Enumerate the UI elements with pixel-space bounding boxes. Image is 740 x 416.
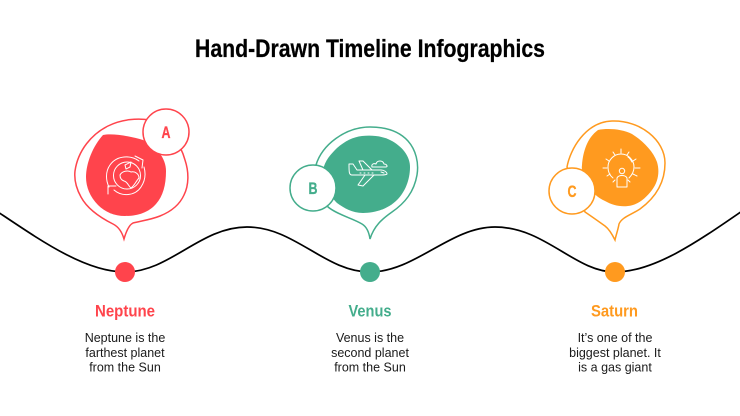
- blob: Neptune: [86, 134, 166, 216]
- description: Saturn: biggest planet. It: [569, 346, 661, 360]
- marker dot: Saturn: [605, 262, 625, 282]
- description: Venus: Venus is the: [336, 331, 404, 345]
- milestone: Venus: [290, 127, 418, 374]
- milestone: Saturn: [549, 121, 665, 374]
- description: Neptune: farthest planet: [85, 346, 165, 360]
- pin outline: Venus: [316, 127, 418, 239]
- icon: light bulb with person: [603, 149, 640, 187]
- blob: Venus: [323, 136, 410, 213]
- marker dot: Neptune: [115, 262, 135, 282]
- blob: Saturn: [582, 129, 658, 206]
- description: Venus: from the Sun: [334, 360, 406, 374]
- description: Saturn: is a gas giant: [578, 360, 652, 374]
- badge: C: C: [568, 182, 576, 201]
- badge: B: B: [308, 179, 318, 198]
- marker dot: Venus: [360, 262, 380, 282]
- icon: globe with arrows: [106, 156, 145, 195]
- pin outline: Saturn: [567, 121, 665, 240]
- description: Neptune: from the Sun: [89, 360, 161, 374]
- icon: airplane and cloud: [349, 161, 387, 186]
- badge: C: [549, 168, 595, 214]
- description: Neptune: Neptune is the: [85, 331, 165, 345]
- heading: Neptune: Neptune: [95, 302, 155, 320]
- badge: A: [143, 109, 189, 155]
- heading: Venus: Venus: [348, 302, 392, 320]
- description: Saturn: It’s one of the: [578, 331, 652, 345]
- pin outline: Neptune: [75, 119, 188, 239]
- heading: Saturn: Saturn: [591, 302, 638, 320]
- badge: B: [290, 165, 336, 211]
- description: Venus: second planet: [331, 346, 409, 360]
- timeline curve: [0, 209, 740, 272]
- title: Hand-Drawn Timeline Infographics: [195, 35, 545, 63]
- badge: A: A: [162, 123, 170, 142]
- milestone: Neptune: [75, 109, 189, 374]
